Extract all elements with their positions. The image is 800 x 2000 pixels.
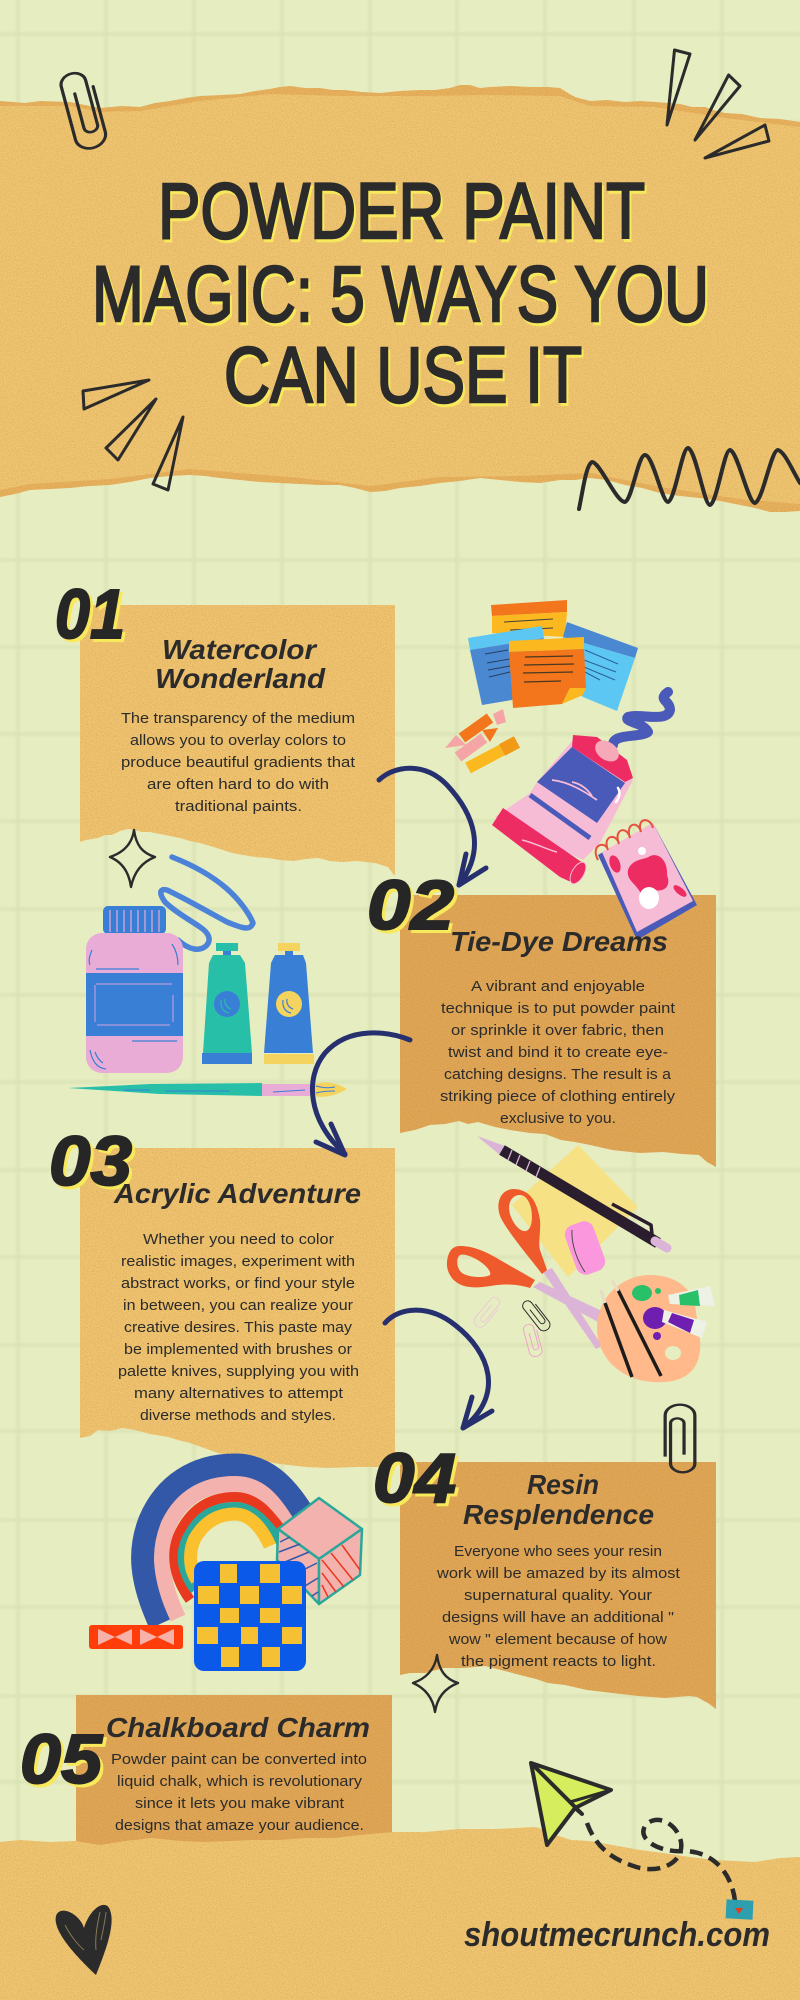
icon: four point star lower [413, 1655, 458, 1712]
scissors handles [447, 1189, 547, 1288]
card 2 number: 02 [367, 866, 454, 944]
card 5 heading: Chalkboard Charm [106, 1712, 370, 1743]
icon: blue scribble [161, 857, 253, 949]
card 4 body text: supernatural quality. Your [464, 1588, 652, 1604]
icon: paper plane [531, 1763, 611, 1845]
card 3 body text [118, 1232, 359, 1424]
panel: card 5 [76, 1695, 392, 1870]
card 2 body text: technique is to put powder paint [441, 1001, 675, 1017]
card 1 number: 01 [58, 578, 128, 656]
card 3 body text: palette knives, supplying you with [118, 1364, 359, 1380]
card 5 number: 05 [23, 1723, 106, 1801]
card 2 number: 02 [370, 869, 457, 947]
card 5 body text [111, 1752, 367, 1834]
card 4 body text: work will be amazed by its almost [436, 1566, 680, 1582]
icon: teal tube [202, 943, 252, 1064]
card 4 body text: wow " element because of how [448, 1632, 667, 1648]
icon: paint jar [86, 906, 183, 1073]
card 3 body text: Whether you need to color [143, 1232, 334, 1248]
card 2 body text: A vibrant and enjoyable [471, 979, 645, 995]
card 4 heading: Resin [527, 1469, 599, 1500]
card 2 body text: exclusive to you. [500, 1111, 616, 1127]
icon: highlighters [445, 709, 517, 768]
panel: card 2 [400, 895, 716, 1167]
card 1 heading: Wonderland [155, 663, 326, 694]
card 4 heading [463, 1469, 654, 1530]
icon: dashed flight path [587, 1820, 735, 1901]
card 2 body text: or sprinkle it over fabric, then [451, 1023, 664, 1039]
card 1 body text: traditional paints. [175, 799, 302, 815]
card 5 number: 05 [20, 1720, 103, 1798]
panel: card 4 [400, 1462, 716, 1709]
card 3 body text: realistic images, experiment with [121, 1254, 355, 1270]
icon: spikes lower left [83, 380, 183, 490]
card 5 body text: since it lets you make vibrant [135, 1796, 344, 1812]
palette [597, 1275, 715, 1382]
title: POWDER PAINT [160, 169, 647, 258]
card 5 body text: Powder paint can be converted into [111, 1752, 367, 1768]
card 4 body text: designs will have an additional " [442, 1610, 674, 1626]
title: CAN USE IT [226, 333, 584, 422]
pen [477, 1136, 667, 1248]
card 3 body text: in between, you can realize your [123, 1298, 353, 1314]
panel: torn paper footer [0, 1827, 800, 2000]
small paper clips [472, 1295, 552, 1358]
card 3 body text: abstract works, or find your style [121, 1276, 355, 1292]
card 4 body text: the pigment reacts to light. [461, 1654, 656, 1670]
icon: blue tube [264, 943, 314, 1064]
icon: rainbow and shapes [89, 1465, 362, 1671]
card 5 body text: designs that amaze your audience. [115, 1818, 364, 1834]
eraser [562, 1218, 608, 1278]
card 3 number: 03 [52, 1125, 135, 1203]
card 3 body text: creative desires. This paste may [124, 1320, 353, 1336]
patterned tape [89, 1625, 183, 1649]
arrow: card 2 to card 3 [312, 1033, 410, 1155]
card 4 body text [436, 1544, 680, 1670]
icon: paper clip right [665, 1405, 695, 1472]
card 5 body text: liquid chalk, which is revolutionary [117, 1774, 363, 1790]
icon: paperclip top left [59, 69, 108, 152]
rainbow arcs [143, 1465, 302, 1624]
card 3 body text: be implemented with brushes or [124, 1342, 352, 1358]
title: POWDER PAINT [158, 166, 645, 255]
card 1 body text: The transparency of the medium [121, 711, 355, 727]
card 1 heading [155, 634, 326, 694]
arrow: card 3 to card 4 [385, 1310, 492, 1428]
card 1 body text [121, 711, 355, 815]
icon: art tools group [447, 1136, 715, 1382]
icon: four point star upper [110, 830, 155, 887]
icon: heart [56, 1905, 112, 1975]
card 3 body text: many alternatives to attempt [134, 1386, 343, 1402]
cube [277, 1498, 362, 1604]
card 2 body text: catching designs. The result is a [444, 1067, 672, 1083]
yellow note paper [512, 1145, 638, 1277]
panel: torn paper header [0, 85, 800, 512]
card 1 body text: allows you to overlay colors to [130, 733, 346, 749]
card 4 number: 04 [373, 1439, 456, 1517]
icon: spikes top right [667, 50, 769, 158]
panel: card 3 [80, 1148, 395, 1470]
card 2 body text [440, 979, 676, 1127]
website footer text: shoutmecrunch.com [464, 1916, 770, 1954]
icon: paint tube [492, 692, 670, 886]
panel: card 1 [80, 605, 395, 876]
icon: paint brush [68, 1082, 347, 1097]
scissors blades [533, 1268, 604, 1349]
icon: zigzag scribble [579, 448, 800, 509]
card 2 heading: Tie-Dye Dreams [450, 926, 668, 957]
card 4 body text: Everyone who sees your resin [454, 1544, 662, 1560]
card 4 heading: Resplendence [463, 1499, 654, 1530]
title: CAN USE IT [224, 330, 582, 419]
arrow: card 1 to card 2 [379, 768, 486, 885]
title [92, 166, 711, 422]
icon: notebook with paint splat [596, 820, 697, 940]
card 3 body text: diverse methods and styles. [140, 1408, 336, 1424]
icon: sticky notes [468, 600, 638, 711]
card 4 number: 04 [376, 1442, 459, 1520]
icon: envelope [726, 1899, 754, 1920]
card 3 heading: Acrylic Adventure [113, 1178, 361, 1209]
card 3 number: 03 [49, 1122, 132, 1200]
card 1 body text: produce beautiful gradients that [121, 755, 355, 771]
checker block [194, 1561, 306, 1671]
card 2 body text: twist and bind it to create eye- [448, 1045, 668, 1061]
card 1 heading: Watercolor [162, 634, 318, 665]
card 1 number: 01 [55, 575, 125, 653]
card 1 body text: are often hard to do with [147, 777, 329, 793]
card 2 body text: striking piece of clothing entirely [440, 1089, 676, 1105]
